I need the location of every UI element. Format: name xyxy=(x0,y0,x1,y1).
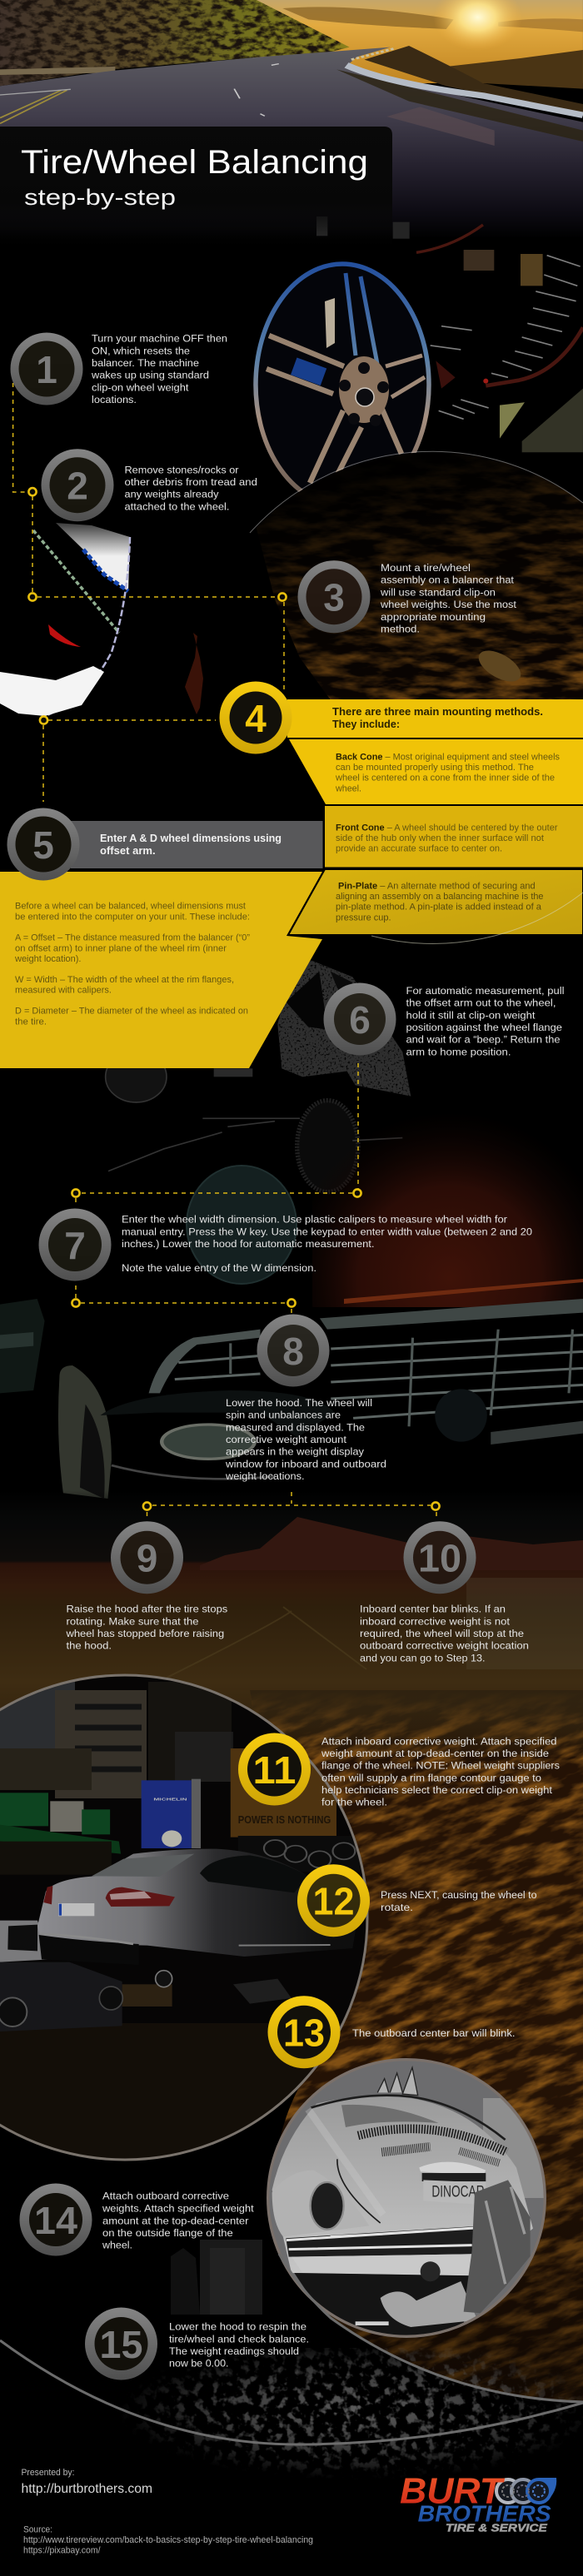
step 12 xyxy=(297,1864,537,1937)
step badge 5: 5 xyxy=(32,823,54,867)
back cone: wheel. xyxy=(335,783,361,793)
step text 1: balancer. The machine xyxy=(92,357,199,369)
text: dimensions intro: be entered into the computer on your unit. These include: xyxy=(15,912,250,922)
text: dimensions intro: W = Width – The width of the wheel at the rim flanges, xyxy=(15,975,234,985)
photo: gravel tread circle xyxy=(250,451,583,699)
step 13 xyxy=(268,1996,515,2068)
step text 15: Lower the hood to respin the xyxy=(169,2321,306,2333)
step text 3 xyxy=(380,562,517,635)
logo: Burt Brothers: BURT xyxy=(400,2471,505,2511)
step text 7: inches.) Lower the hood for automatic measurement. xyxy=(122,1238,375,1250)
curved divider arcs xyxy=(0,2254,583,2444)
step 7 xyxy=(38,1209,532,1281)
photo circle: city street with sedan: POWER IS NOTHING xyxy=(238,1814,331,1826)
step text 3: assembly on a balancer that xyxy=(381,574,515,586)
photo: alloy wheel xyxy=(256,264,429,505)
step badge 10 xyxy=(403,1521,476,1594)
step text 9: the hood. xyxy=(67,1640,112,1652)
step badge 11: 11 xyxy=(253,1748,296,1792)
footer: sources: Source: xyxy=(23,2524,52,2534)
step badge 9: 9 xyxy=(137,1537,157,1580)
step badge 12 xyxy=(297,1864,370,1937)
step badge 6: 6 xyxy=(349,998,371,1042)
step text 7: Note the value entry of the W dimension. xyxy=(122,1262,316,1274)
step text 15: now be 0.00. xyxy=(169,2358,228,2370)
step text 1: wakes up using standard xyxy=(91,370,209,381)
step badge 13 xyxy=(268,1996,340,2068)
step text 6 xyxy=(406,985,565,1057)
panel: step 4 mounting methods xyxy=(287,699,583,935)
footer: sources xyxy=(23,2524,313,2556)
step 8 xyxy=(225,1314,386,1482)
photo circle: city street with sedan: MICHELIN xyxy=(153,1798,187,1802)
step text 15: The weight readings should xyxy=(169,2345,299,2357)
step text 10 xyxy=(360,1604,529,1663)
step badge 5 xyxy=(7,808,80,881)
pin plate: pin-plate method. A pin-plate is added instead of a xyxy=(336,903,542,913)
step text 10: required, the wheel will stop at the xyxy=(360,1628,524,1639)
icon: three tires xyxy=(496,2478,556,2504)
step text 14: Attach outboard corrective xyxy=(102,2191,229,2202)
footer: presented by xyxy=(22,2468,152,2496)
step badge 14 xyxy=(20,2183,92,2256)
connector lines: dashed path between steps xyxy=(13,383,440,1519)
photo: desert road xyxy=(0,1490,583,1757)
footer: sources: https://pixabay.com/ xyxy=(23,2546,101,2556)
step text 8: spin and unbalances are xyxy=(226,1410,341,1421)
photo: door and asphalt behind steps 14 and 15 xyxy=(83,2240,583,2481)
pin plate: pressure cup. xyxy=(336,913,391,922)
heading band: They include: xyxy=(332,719,400,730)
step text 10: outboard corrective weight location xyxy=(360,1640,529,1652)
step text 15: tire/wheel and check balance. xyxy=(169,2333,309,2345)
step badge 1 xyxy=(10,333,83,405)
back cone: can be mounted properly using this method. The xyxy=(336,763,534,773)
step text 3: method. xyxy=(381,624,420,635)
brake caliper xyxy=(325,298,335,348)
step text 7: Enter the wheel width dimension. Use plastic calipers to measure wheel width for xyxy=(122,1213,507,1225)
panel: step 5 heading bar xyxy=(71,821,323,868)
step badge 4 xyxy=(220,681,292,754)
step badge 3: 3 xyxy=(323,576,345,619)
step text 6: hold it still at clip-on weight xyxy=(406,1009,536,1021)
text: dimensions intro: on offset arm) to inner plane of the wheel rim (inner xyxy=(15,943,227,953)
step text 2: any weights already xyxy=(125,489,219,500)
step text 1 xyxy=(91,333,227,405)
step text 11 xyxy=(321,1735,560,1808)
step text 8: weight locations. xyxy=(225,1470,305,1482)
text: dimensions intro xyxy=(14,902,250,1027)
step badge 15: 15 xyxy=(100,2323,143,2366)
panel: step 5 details xyxy=(0,872,322,1068)
step badge 4: 4 xyxy=(245,697,267,740)
back cone: wheel is centered on a cone from the inner side of the xyxy=(335,773,555,783)
step badge 1: 1 xyxy=(36,348,57,391)
step badge 6 xyxy=(323,982,396,1056)
step text 1: ON, which resets the xyxy=(92,345,190,356)
step 10 xyxy=(360,1521,529,1663)
step text 8: window for inboard and outboard xyxy=(225,1458,386,1470)
step text 6: arm to home position. xyxy=(406,1046,511,1057)
step badge 8: 8 xyxy=(282,1330,304,1373)
step text 11: Attach inboard corrective weight. Attach specified xyxy=(321,1735,557,1747)
step text 3: appropriate mounting xyxy=(381,611,486,623)
step text 8: Lower the hood. The wheel will xyxy=(226,1397,372,1409)
step badge 11 xyxy=(238,1733,311,1805)
footer: sources: http://www.tirereview.com/back-to-basics-step-by-step-tire-wheel-balancing xyxy=(23,2535,313,2545)
step text 1: clip-on wheel weight xyxy=(92,381,189,393)
step text 1: Turn your machine OFF then xyxy=(92,333,227,345)
step text 3: Mount a tire/wheel xyxy=(381,562,471,574)
text: dimensions intro: D = Diameter – The diameter of the wheel as indicated on xyxy=(15,1007,248,1017)
photo: ground red glow xyxy=(312,1107,583,1307)
pin plate xyxy=(288,869,583,935)
step text 10: inboard corrective weight is not xyxy=(360,1615,511,1627)
step 15 xyxy=(85,2308,309,2380)
step text 9 xyxy=(65,1604,227,1652)
step 9 xyxy=(65,1521,227,1652)
step text 12: rotate. xyxy=(381,1902,413,1913)
step badge 2: 2 xyxy=(67,465,88,508)
connector nodes xyxy=(28,488,440,1510)
photo: machinery behind wheel xyxy=(316,216,583,452)
heading band xyxy=(287,699,583,738)
step text 6: For automatic measurement, pull xyxy=(406,985,565,997)
step badge 13: 13 xyxy=(283,2012,325,2055)
footer: presented by: Presented by: xyxy=(22,2468,75,2478)
logo: Burt Brothers xyxy=(400,2471,556,2534)
step badge 8 xyxy=(257,1314,330,1387)
step 14 xyxy=(20,2183,254,2256)
step text 14 xyxy=(102,2191,254,2251)
step 3 xyxy=(298,560,517,635)
photo: gravel tread background xyxy=(250,1690,583,2401)
step text 3: will use standard clip-on xyxy=(380,586,496,598)
step text 7: manual entry. Press the W key. Use the keypad to enter width value (between 2 and 20 xyxy=(122,1226,532,1237)
front cone: Front Cone – A wheel should be centered by the outer xyxy=(336,823,558,833)
step text 9: wheel has stopped before raising xyxy=(65,1628,224,1639)
front cone: provide an accurate surface to center on. xyxy=(336,844,502,854)
logo: Burt Brothers: TIRE & SERVICE xyxy=(446,2523,548,2534)
text: dimensions intro: A = Offset – The distance measured from the balancer (“0” xyxy=(15,932,250,942)
front cone: side of the hub only when the inner surface will not xyxy=(336,833,544,843)
back cone: Back Cone – Most original equipment and steel wheels xyxy=(336,752,560,762)
step text 11: often will supply a rim flange contour gauge to xyxy=(321,1772,541,1783)
step badge 14: 14 xyxy=(34,2199,77,2242)
title: Tire/Wheel Balancing xyxy=(21,144,368,181)
step text 10: and you can go to Step 13. xyxy=(360,1652,485,1663)
text: dimensions intro: Before a wheel can be balanced, wheel dimensions must xyxy=(15,902,246,912)
step text 2 xyxy=(125,464,257,512)
step text 9: rotating. Make sure that the xyxy=(67,1615,199,1627)
step text 2: other debris from tread and xyxy=(125,476,257,488)
step text 3: wheel weights. Use the most xyxy=(380,599,517,610)
pin plate: Pin-Plate – An alternate method of securing and xyxy=(338,881,536,891)
subtitle: step-by-step xyxy=(24,185,176,210)
step text 8: measured and displayed. The xyxy=(226,1421,365,1433)
step text 11: flange of the wheel. NOTE: Wheel weight suppliers xyxy=(321,1760,560,1772)
step text 8 xyxy=(225,1397,386,1482)
heading band: There are three main mounting methods. xyxy=(332,706,543,718)
photo: muddy jeep xyxy=(106,957,414,1192)
step badge 3 xyxy=(298,560,370,633)
header photo: road at sunset xyxy=(0,0,583,239)
step 1 xyxy=(10,333,227,405)
photo circle: black and white beetle: DINOCAR xyxy=(431,2183,485,2201)
title panel xyxy=(0,127,392,250)
logo: Burt Brothers: BROTHERS xyxy=(418,2500,551,2526)
pin plate: aligning an assembly on a balancing machine is the xyxy=(336,892,543,902)
step text 7 xyxy=(122,1213,532,1274)
step text 12 xyxy=(381,1889,537,1913)
step text 14: weights. Attach specified weight xyxy=(102,2203,254,2215)
step text 11: help technicians select the correct clip-on weight xyxy=(321,1784,553,1796)
step text 11: for the wheel. xyxy=(321,1797,387,1808)
step badge 12: 12 xyxy=(313,1880,355,1923)
step text 14: amount at the top-dead-center xyxy=(102,2215,248,2226)
text: dimensions intro: measured with calipers. xyxy=(15,986,112,996)
step text 15 xyxy=(169,2321,309,2370)
step text 6: and wait for a “beep.” Return the xyxy=(406,1034,561,1046)
step badge 9 xyxy=(111,1521,183,1594)
photo circle: black and white beetle xyxy=(267,2056,547,2340)
step text 1: locations. xyxy=(92,394,137,405)
step badge 7 xyxy=(38,1209,112,1281)
step text 6: position against the wheel flange xyxy=(406,1022,562,1033)
step 11 xyxy=(238,1733,560,1808)
footer: presented by: http://burtbrothers.com xyxy=(22,2482,152,2496)
step text 9: Raise the hood after the tire stops xyxy=(67,1604,227,1615)
step text 2: Remove stones/rocks or xyxy=(125,464,238,475)
step text 14: wheel. xyxy=(102,2240,132,2251)
step badge 15 xyxy=(85,2308,157,2380)
panel: step 5 heading bar: offset arm. xyxy=(100,845,156,857)
step text 13: The outboard center bar will blink. xyxy=(352,2027,515,2039)
panel: step 5 heading bar: Enter A & D wheel dimensions using xyxy=(100,833,282,844)
step text 6: the offset arm out to the wheel, xyxy=(406,997,556,1009)
front cone xyxy=(325,806,583,868)
step badge 10: 10 xyxy=(418,1537,461,1580)
step 6 xyxy=(323,982,565,1057)
step text 2: attached to the wheel. xyxy=(125,500,230,512)
text: dimensions intro: weight location). xyxy=(14,954,82,964)
step badge 7: 7 xyxy=(64,1224,86,1267)
step text 10: Inboard center bar blinks. If an xyxy=(360,1604,506,1615)
step text 12: Press NEXT, causing the wheel to xyxy=(381,1889,537,1901)
step 2 xyxy=(42,449,257,521)
step text 11: weight amount at top-dead-center on the inside xyxy=(321,1748,549,1759)
photo circle: city street with sedan xyxy=(0,1675,367,2165)
step text 8: appears in the weight display xyxy=(226,1446,365,1458)
photo: vintage car front and grille xyxy=(0,1166,583,1499)
back cone xyxy=(289,739,583,804)
step text 8: corrective weight amount xyxy=(226,1434,347,1445)
photo: posterized tire fragment xyxy=(0,523,203,716)
step badge 2 xyxy=(42,449,113,521)
step text 14: on the outside flange of the xyxy=(102,2227,233,2239)
text: dimensions intro: the tire. xyxy=(15,1017,47,1027)
